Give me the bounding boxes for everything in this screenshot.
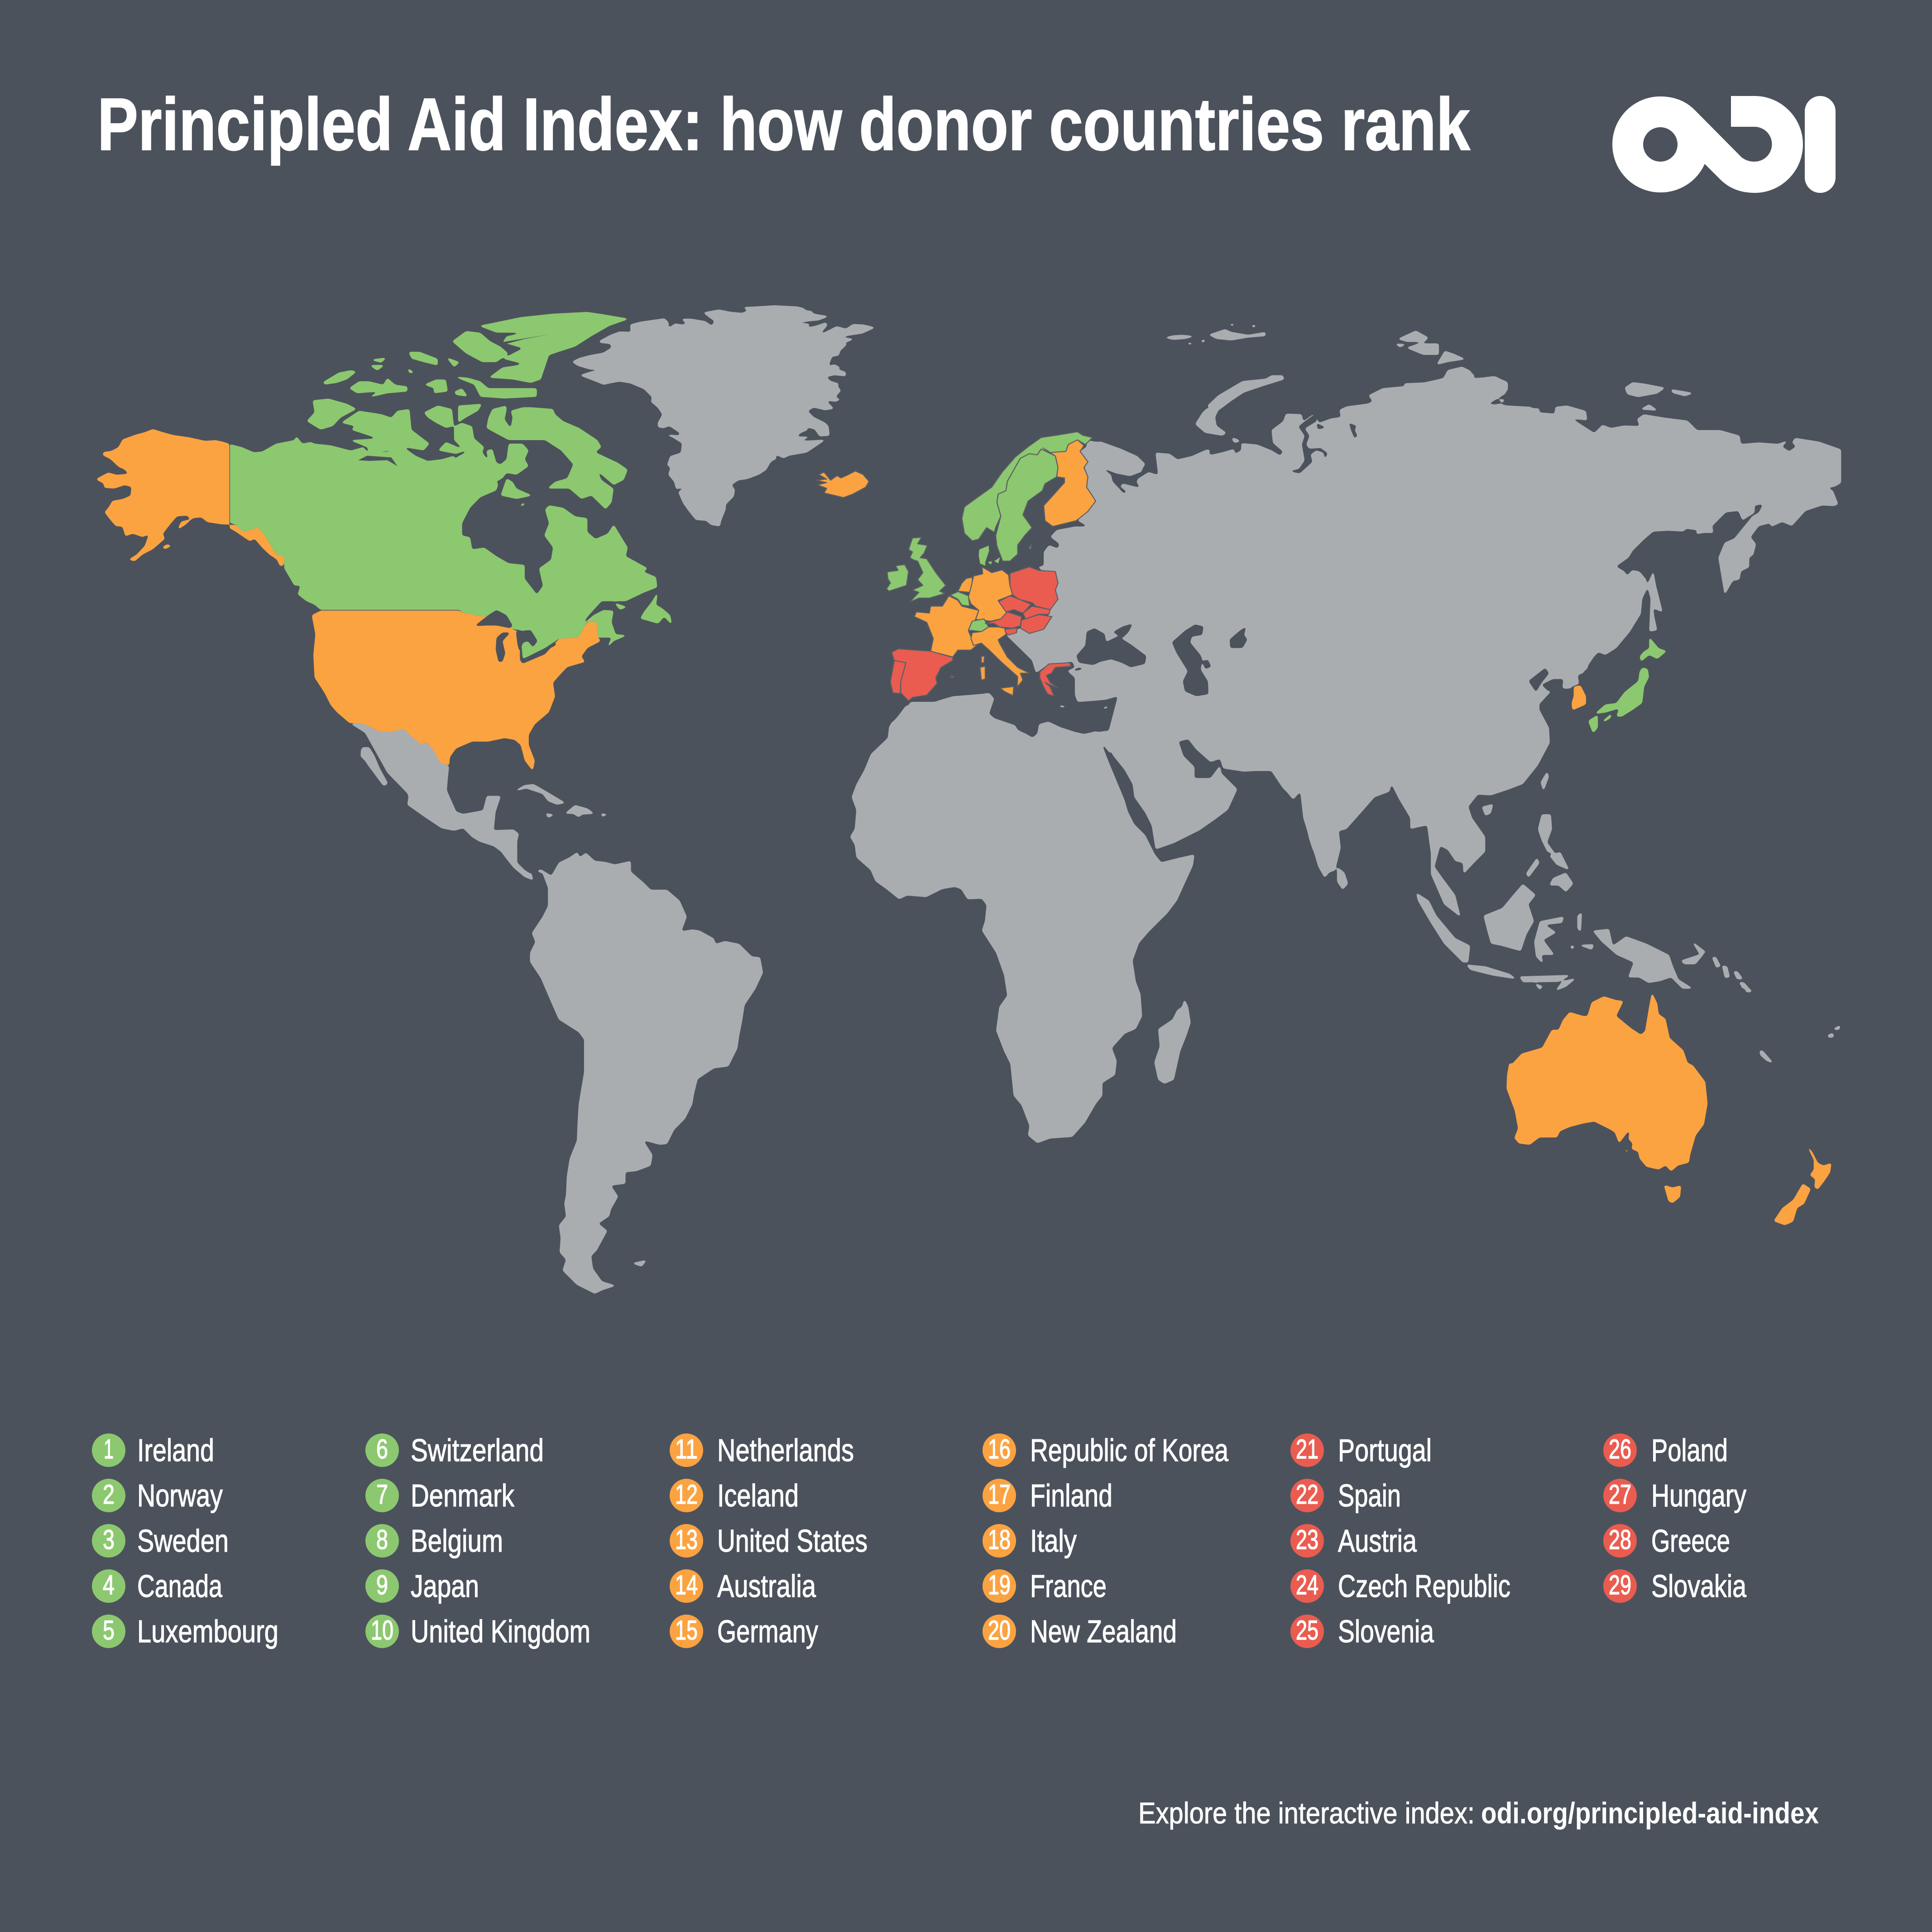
rank 20 New Zealand <box>983 1614 1177 1649</box>
sea: Marmara <box>1071 667 1085 671</box>
rank 3 Sweden: 3 <box>103 1525 115 1555</box>
rank 2 Norway: Norway <box>137 1478 223 1513</box>
footer link: odi.org/principled-aid-index <box>1481 1796 1819 1830</box>
footer link: Explore the interactive index: <box>1138 1796 1475 1830</box>
rank 7 Denmark <box>365 1478 515 1513</box>
rank 26 Poland <box>1603 1433 1728 1468</box>
rank 6 Switzerland: Switzerland <box>411 1433 544 1468</box>
rank 18 Italy <box>983 1523 1077 1558</box>
rank 17 Finland: 17 <box>988 1479 1011 1510</box>
rank 25 Slovenia <box>1290 1614 1434 1649</box>
land: Siberian islands and Sakhalin <box>1554 382 1694 632</box>
rank 12 Iceland <box>670 1478 799 1513</box>
rank 29 Slovakia: 29 <box>1609 1570 1631 1600</box>
country: Portugal <box>890 661 906 694</box>
rank 3 Sweden: Sweden <box>137 1523 229 1558</box>
country: United States <box>96 429 601 771</box>
rank 11 Netherlands: Netherlands <box>717 1433 854 1468</box>
rank 21 Portugal: 21 <box>1296 1434 1318 1464</box>
rank 25 Slovenia: 25 <box>1296 1615 1318 1645</box>
country: Italy <box>971 627 1030 695</box>
land: eastern Asia <box>1449 367 1841 724</box>
map: donor countries <box>96 312 1831 1225</box>
rank 19 France: France <box>1030 1568 1107 1604</box>
rank 28 Greece: Greece <box>1651 1523 1730 1558</box>
land: Madagascar <box>1154 999 1191 1084</box>
rank 24 Czech Republic: 24 <box>1296 1570 1318 1600</box>
rank 20 New Zealand: New Zealand <box>1030 1614 1177 1649</box>
rank 29 Slovakia <box>1603 1568 1746 1604</box>
country: Greece <box>1040 663 1071 696</box>
rank 13 United States: United States <box>717 1523 868 1558</box>
logo: ODI <box>1612 96 1836 193</box>
country: Ireland <box>887 565 909 591</box>
legend column: ranks 1 to 5 <box>92 1433 278 1649</box>
legend column: ranks 21 to 25 <box>1290 1433 1510 1649</box>
rank 10 United Kingdom: United Kingdom <box>411 1614 590 1649</box>
legend column: ranks 6 to 10 <box>365 1433 590 1649</box>
country: Germany <box>968 567 1012 621</box>
rank 27 Hungary: 27 <box>1609 1479 1631 1510</box>
footer link <box>1138 1796 1819 1830</box>
land: Greenland <box>571 305 876 527</box>
rank 3 Sweden <box>92 1523 229 1558</box>
rank 5 Luxembourg: Luxembourg <box>137 1614 278 1649</box>
land: South-East Asian islands and Oceania <box>1337 771 1774 1064</box>
rank 9 Japan: 9 <box>376 1570 388 1600</box>
country: Czech Republic <box>999 596 1031 613</box>
rank 4 Canada: Canada <box>137 1568 222 1604</box>
land: Fiji <box>1827 1025 1841 1038</box>
rank 4 Canada <box>92 1568 222 1604</box>
sea: Aral <box>1230 626 1247 648</box>
rank 22 Spain <box>1290 1478 1401 1513</box>
rank 8 Belgium: Belgium <box>411 1523 503 1558</box>
map: grey land masses <box>350 305 1841 1294</box>
legend column: ranks 11 to 15 <box>670 1433 868 1649</box>
rank 15 Germany: Germany <box>717 1614 818 1649</box>
rank 16 Republic of Korea: Republic of Korea <box>1030 1433 1228 1468</box>
rank 27 Hungary <box>1603 1478 1746 1513</box>
country: Japan <box>1588 637 1667 733</box>
rank 24 Czech Republic: Czech Republic <box>1338 1568 1510 1604</box>
rank 5 Luxembourg: 5 <box>103 1615 115 1645</box>
rank 26 Poland: 26 <box>1609 1434 1631 1464</box>
rank 2 Norway <box>92 1478 223 1513</box>
sea: Gulf of Ob and Yenisei <box>1288 414 1357 473</box>
land: South America <box>530 852 763 1294</box>
rank 18 Italy: Italy <box>1030 1523 1077 1558</box>
country: Canada <box>230 312 672 659</box>
rank 13 United States <box>670 1523 868 1558</box>
country: Switzerland <box>968 619 988 632</box>
rank 29 Slovakia: Slovakia <box>1651 1568 1746 1604</box>
sea: Sea of Azov <box>1112 623 1133 638</box>
lakes and fjords: Canada <box>358 335 561 466</box>
rank 8 Belgium: 8 <box>376 1525 388 1555</box>
rank 15 Germany: 15 <box>675 1615 698 1645</box>
land: North Africa coast <box>864 693 1098 770</box>
world map <box>96 305 1841 1294</box>
rank 1 Ireland: 1 <box>104 1434 114 1464</box>
country: Iceland <box>816 471 869 498</box>
country: New Zealand <box>1774 1142 1831 1225</box>
rank 11 Netherlands: 11 <box>675 1434 698 1464</box>
rank 28 Greece: 28 <box>1609 1525 1631 1555</box>
map: inland seas and lakes <box>1071 414 1549 696</box>
country: Hungary <box>1020 615 1052 633</box>
rank 21 Portugal <box>1290 1433 1432 1468</box>
land: Mexico north <box>350 723 456 821</box>
sea: Black Sea <box>1076 628 1146 667</box>
country: Spain <box>892 649 954 701</box>
rank 23 Austria: Austria <box>1338 1523 1417 1558</box>
rank 9 Japan: Japan <box>411 1568 479 1604</box>
rank 23 Austria <box>1290 1523 1417 1558</box>
rank 1 Ireland <box>92 1433 214 1468</box>
lakes: Great Lakes <box>474 610 558 664</box>
rank 7 Denmark: Denmark <box>411 1478 515 1513</box>
rank 23 Austria: 23 <box>1296 1525 1318 1555</box>
rank 14 Australia: Australia <box>717 1568 816 1604</box>
land: Mexico and Central America <box>360 747 551 881</box>
country: United Kingdom <box>909 537 946 602</box>
rank 27 Hungary: Hungary <box>1651 1478 1746 1513</box>
rank 25 Slovenia: Slovenia <box>1338 1614 1434 1649</box>
legend: country ranking <box>92 1433 1746 1649</box>
rank 22 Spain: 22 <box>1296 1479 1318 1510</box>
land: Caribbean islands <box>512 784 609 818</box>
rank 14 Australia: 14 <box>675 1570 698 1600</box>
rank 8 Belgium <box>365 1523 503 1558</box>
land: eastern Europe and Turkey <box>1006 441 1222 738</box>
rank 26 Poland: Poland <box>1651 1433 1728 1468</box>
country: Netherlands <box>958 577 972 592</box>
rank 1 Ireland: Ireland <box>137 1433 214 1468</box>
rank 10 United Kingdom <box>365 1614 590 1649</box>
rank 7 Denmark: 7 <box>376 1479 388 1510</box>
country: Denmark <box>979 546 1000 566</box>
rank 6 Switzerland <box>365 1433 544 1468</box>
rank 15 Germany <box>670 1614 818 1649</box>
legend column: ranks 16 to 20 <box>983 1433 1228 1649</box>
rank 16 Republic of Korea: 16 <box>988 1434 1011 1464</box>
rank 12 Iceland: 12 <box>675 1479 698 1510</box>
rank 16 Republic of Korea <box>983 1433 1228 1468</box>
countries: continental Europe <box>816 440 1096 701</box>
rank 20 New Zealand: 20 <box>988 1615 1011 1645</box>
rank 9 Japan <box>365 1568 479 1604</box>
country: Republic of Korea <box>1572 685 1586 710</box>
rank 24 Czech Republic <box>1290 1568 1510 1604</box>
land: Novaya Zemlya and Arctic islands <box>1163 323 1505 443</box>
rank 14 Australia <box>670 1568 816 1604</box>
countries: Nordic and western Europe, high-ranked <box>887 432 1093 602</box>
sea: Caspian <box>1172 624 1212 696</box>
country: Belgium <box>950 592 970 606</box>
rank 17 Finland <box>983 1478 1112 1513</box>
land: southern Asia <box>1222 657 1594 917</box>
country: Austria <box>985 612 1021 628</box>
country: France <box>914 596 979 657</box>
rank 10 United Kingdom: 10 <box>371 1615 393 1645</box>
land: Arabia and Iran <box>1098 702 1313 851</box>
rank 19 France: 19 <box>988 1570 1011 1600</box>
rank 18 Italy: 18 <box>988 1525 1011 1555</box>
rank 4 Canada: 4 <box>103 1570 115 1600</box>
title: Principled Aid Index: how donor countries rank <box>97 83 1471 166</box>
country: Finland <box>1043 440 1096 527</box>
country: Slovenia <box>1005 628 1017 635</box>
land: northern Asia <box>1087 366 1539 736</box>
rank 6 Switzerland: 6 <box>376 1434 388 1464</box>
country: Norway <box>962 432 1093 541</box>
rank 11 Netherlands <box>670 1433 854 1468</box>
rank 17 Finland: Finland <box>1030 1478 1112 1513</box>
rank 22 Spain: Spain <box>1338 1478 1401 1513</box>
country: Slovakia <box>1023 606 1050 619</box>
sea: Bohai <box>1529 668 1549 692</box>
rank 5 Luxembourg <box>92 1614 278 1649</box>
rank 19 France <box>983 1568 1107 1604</box>
country: Australia <box>1506 992 1707 1203</box>
rank 13 United States: 13 <box>675 1525 698 1555</box>
land: Cyprus and Crete <box>1055 705 1111 709</box>
legend column: ranks 26 to 29 <box>1603 1433 1746 1604</box>
rank 28 Greece <box>1603 1523 1730 1558</box>
rank 2 Norway: 2 <box>103 1479 115 1510</box>
country: Sweden <box>996 449 1058 561</box>
country: Poland <box>1010 567 1058 609</box>
rank 12 Iceland: Iceland <box>717 1478 799 1513</box>
land: Africa <box>850 702 1194 1143</box>
rank 21 Portugal: Portugal <box>1338 1433 1432 1468</box>
